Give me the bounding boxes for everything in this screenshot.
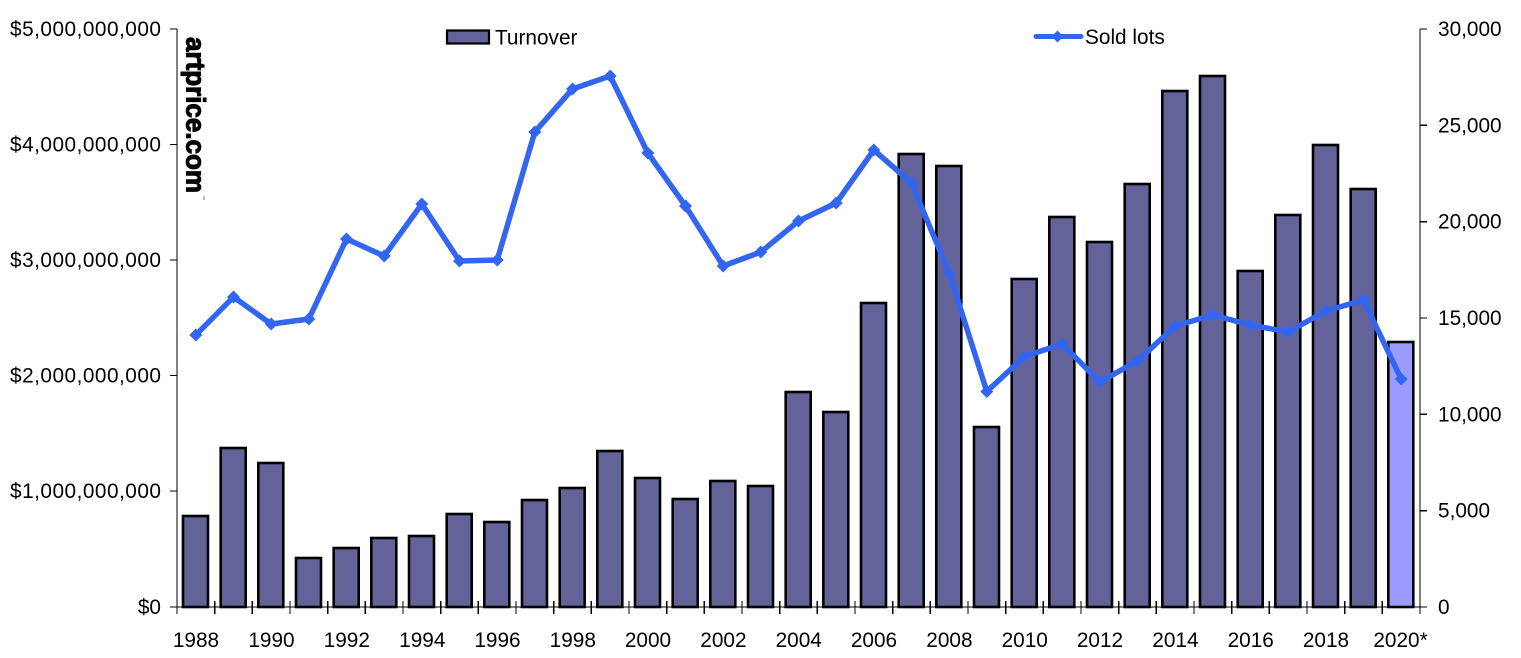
x axis labels: years: 2008 (926, 629, 973, 652)
left axis labels: turnover in dollars: $0 (138, 596, 161, 619)
legend: sold lots: Sold lots (1085, 26, 1165, 49)
logo: artprice.com: artprice.com (180, 37, 210, 193)
x axis labels: years: 2010 (1002, 629, 1048, 652)
x axis labels: years: 2006 (851, 629, 897, 652)
right axis labels: sold lots: 30,000 (1438, 18, 1502, 41)
right axis labels: sold lots: 0 (1438, 596, 1450, 619)
right axis labels: sold lots: 10,000 (1438, 403, 1502, 426)
x axis labels: years: 1998 (550, 629, 596, 652)
x axis labels: years: 2016 (1228, 629, 1274, 652)
x axis labels: years: 2000 (625, 629, 671, 652)
x axis labels: years: 1992 (324, 629, 370, 652)
x axis labels: years: 1990 (248, 629, 295, 652)
x axis labels: years: 1988 (173, 629, 219, 652)
x axis labels: years: 2004 (776, 629, 822, 652)
x axis labels: years (173, 629, 1428, 652)
right axis labels: sold lots: 20,000 (1438, 211, 1502, 234)
x axis labels: years: 2014 (1152, 629, 1199, 652)
right axis labels: sold lots: 25,000 (1438, 114, 1502, 137)
x axis labels: years: 1994 (399, 629, 445, 652)
left axis labels: turnover in dollars: $5,000,000,000 (10, 18, 161, 41)
right axis labels: sold lots: 5,000 (1438, 500, 1490, 523)
left axis labels: turnover in dollars (10, 18, 161, 619)
legend: turnover (447, 26, 578, 50)
x axis labels: years: 1996 (474, 629, 521, 652)
line: sold lots by year (196, 76, 1401, 392)
logo: artprice.com: ™ (200, 195, 206, 200)
left axis labels: turnover in dollars: $1,000,000,000 (10, 480, 161, 503)
x axis labels: years: 2020* (1373, 629, 1428, 652)
right axis labels: sold lots (1438, 18, 1502, 619)
right axis labels: sold lots: 15,000 (1438, 307, 1502, 330)
x axis labels: years: 2012 (1077, 629, 1123, 652)
x axis labels: years: 2002 (700, 629, 747, 652)
left axis labels: turnover in dollars: $2,000,000,000 (10, 364, 161, 388)
bars: turnover by year (183, 76, 1413, 607)
left axis labels: turnover in dollars: $4,000,000,000 (10, 134, 161, 157)
left axis labels: turnover in dollars: $3,000,000,000 (10, 249, 161, 272)
x axis labels: years: 2018 (1303, 629, 1349, 652)
axes and tick marks (170, 29, 1427, 614)
legend: turnover: Turnover (495, 26, 578, 50)
legend: sold lots (1036, 26, 1165, 49)
